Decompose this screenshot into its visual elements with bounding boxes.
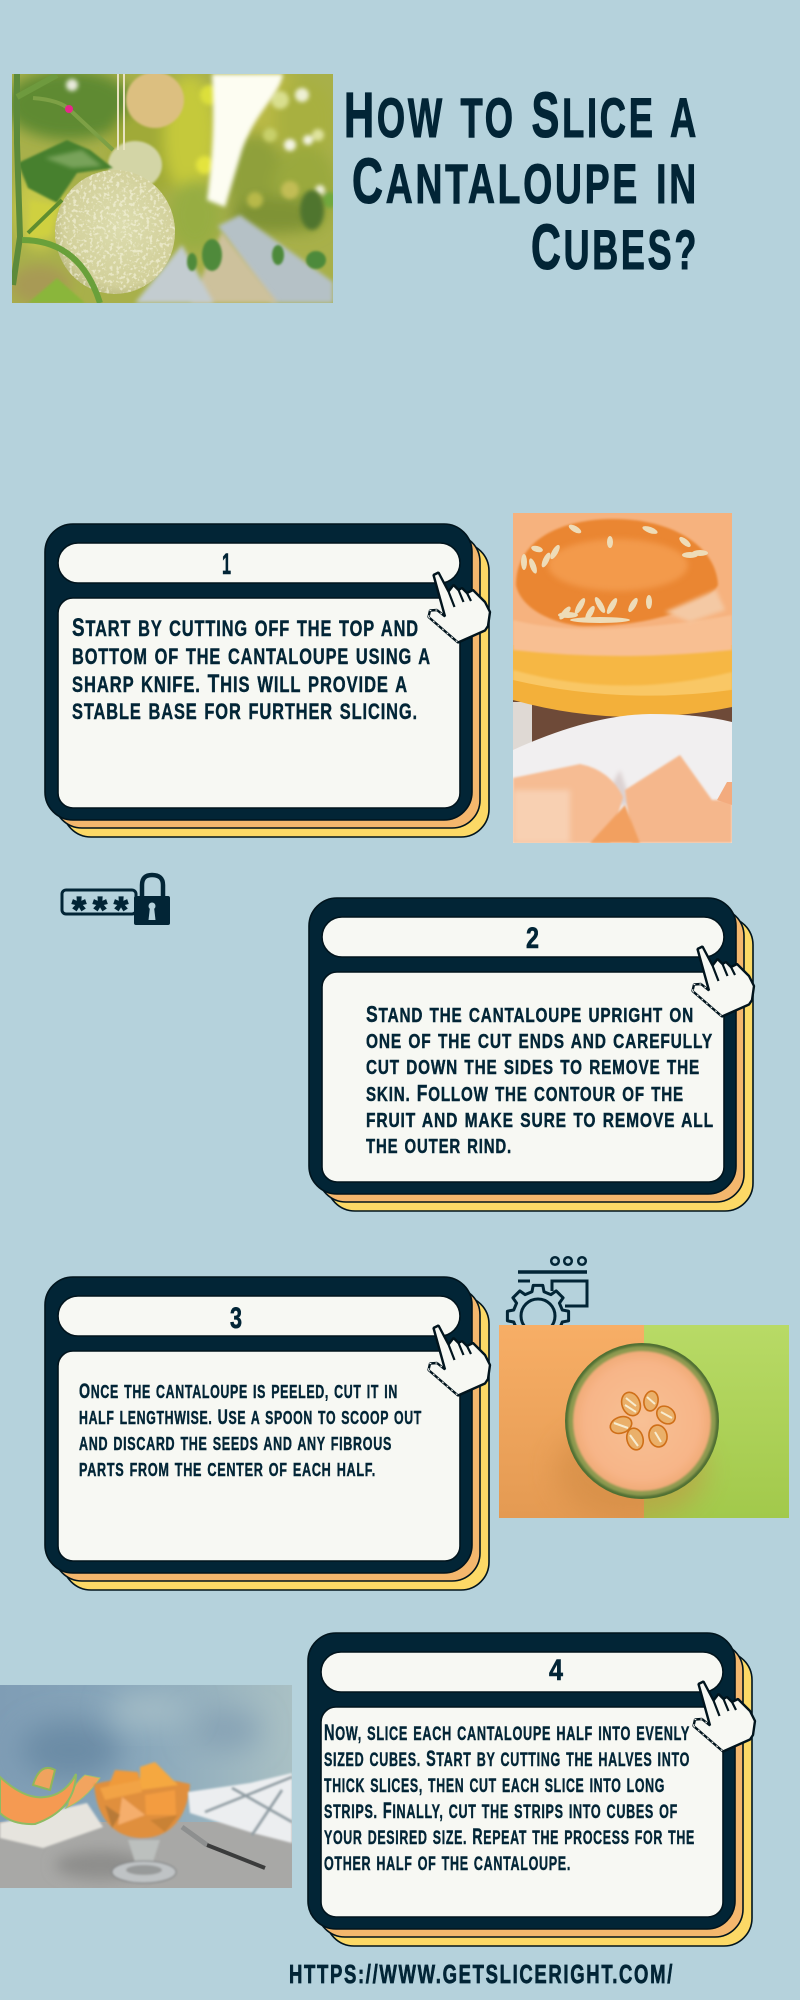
step number 3: 3 — [230, 1302, 242, 1335]
step 3 text: ONCE THE CANTALOUPE IS PEELED, CUT IT IN — [79, 1379, 398, 1403]
panel: step 4 — [308, 1633, 755, 1946]
step 1 text: SHARP KNIFE. THIS WILL PROVIDE A — [72, 670, 408, 698]
step number 2: 2 — [526, 922, 539, 955]
step 4 text: OTHER HALF OF THE CANTALOUPE. — [324, 1853, 571, 1875]
step 1 text: STABLE BASE FOR FURTHER SLICING. — [72, 699, 418, 724]
photo: cantaloupes growing on the vine in a greenhouse — [5, 70, 338, 305]
icon: pointing hand cursor — [428, 1326, 490, 1396]
step 1 text — [72, 614, 431, 724]
step number 4: 4 — [549, 1654, 563, 1687]
panel: step 3 — [45, 1277, 490, 1590]
icon: pointing hand cursor — [428, 572, 490, 642]
step 2 text: SKIN. FOLLOW THE CONTOUR OF THE — [366, 1080, 684, 1106]
step 3 text: HALF LENGTHWISE. USE A SPOON TO SCOOP OUT — [79, 1405, 422, 1429]
photo: halved cantaloupe on orange and green background — [499, 1325, 789, 1520]
step 3 text: PARTS FROM THE CENTER OF EACH HALF. — [79, 1459, 376, 1480]
step 2 text: STAND THE CANTALOUPE UPRIGHT ON — [366, 1001, 694, 1027]
step 3 text — [79, 1379, 422, 1480]
photo: halved cantaloupe and cut pieces on a plate — [513, 513, 732, 843]
icon: password field with padlock — [62, 875, 170, 930]
icon: pointing hand cursor — [694, 1682, 755, 1752]
step number 1: 1 — [222, 548, 231, 581]
step 2 text: THE OUTER RIND. — [366, 1135, 512, 1158]
icon: pointing hand cursor — [692, 946, 754, 1016]
step 4 text — [324, 1720, 695, 1875]
panel: step 1 — [45, 524, 490, 837]
title: CUBES? — [531, 211, 699, 283]
title: HOW TO SLICE A — [344, 79, 699, 151]
step 2 text — [366, 1001, 714, 1158]
step 3 text: AND DISCARD THE SEEDS AND ANY FIBROUS — [79, 1433, 392, 1454]
icon: password field with padlock: *** — [72, 889, 128, 930]
photo: cantaloupe cubes in a glass dessert bowl — [0, 1685, 292, 1888]
title — [344, 79, 699, 283]
step 1 text: BOTTOM OF THE CANTALOUPE USING A — [72, 644, 431, 669]
step 1 text: START BY CUTTING OFF THE TOP AND — [72, 614, 419, 642]
panel: step 2 — [309, 898, 754, 1211]
icon: browser window with gear — [507, 1257, 587, 1347]
